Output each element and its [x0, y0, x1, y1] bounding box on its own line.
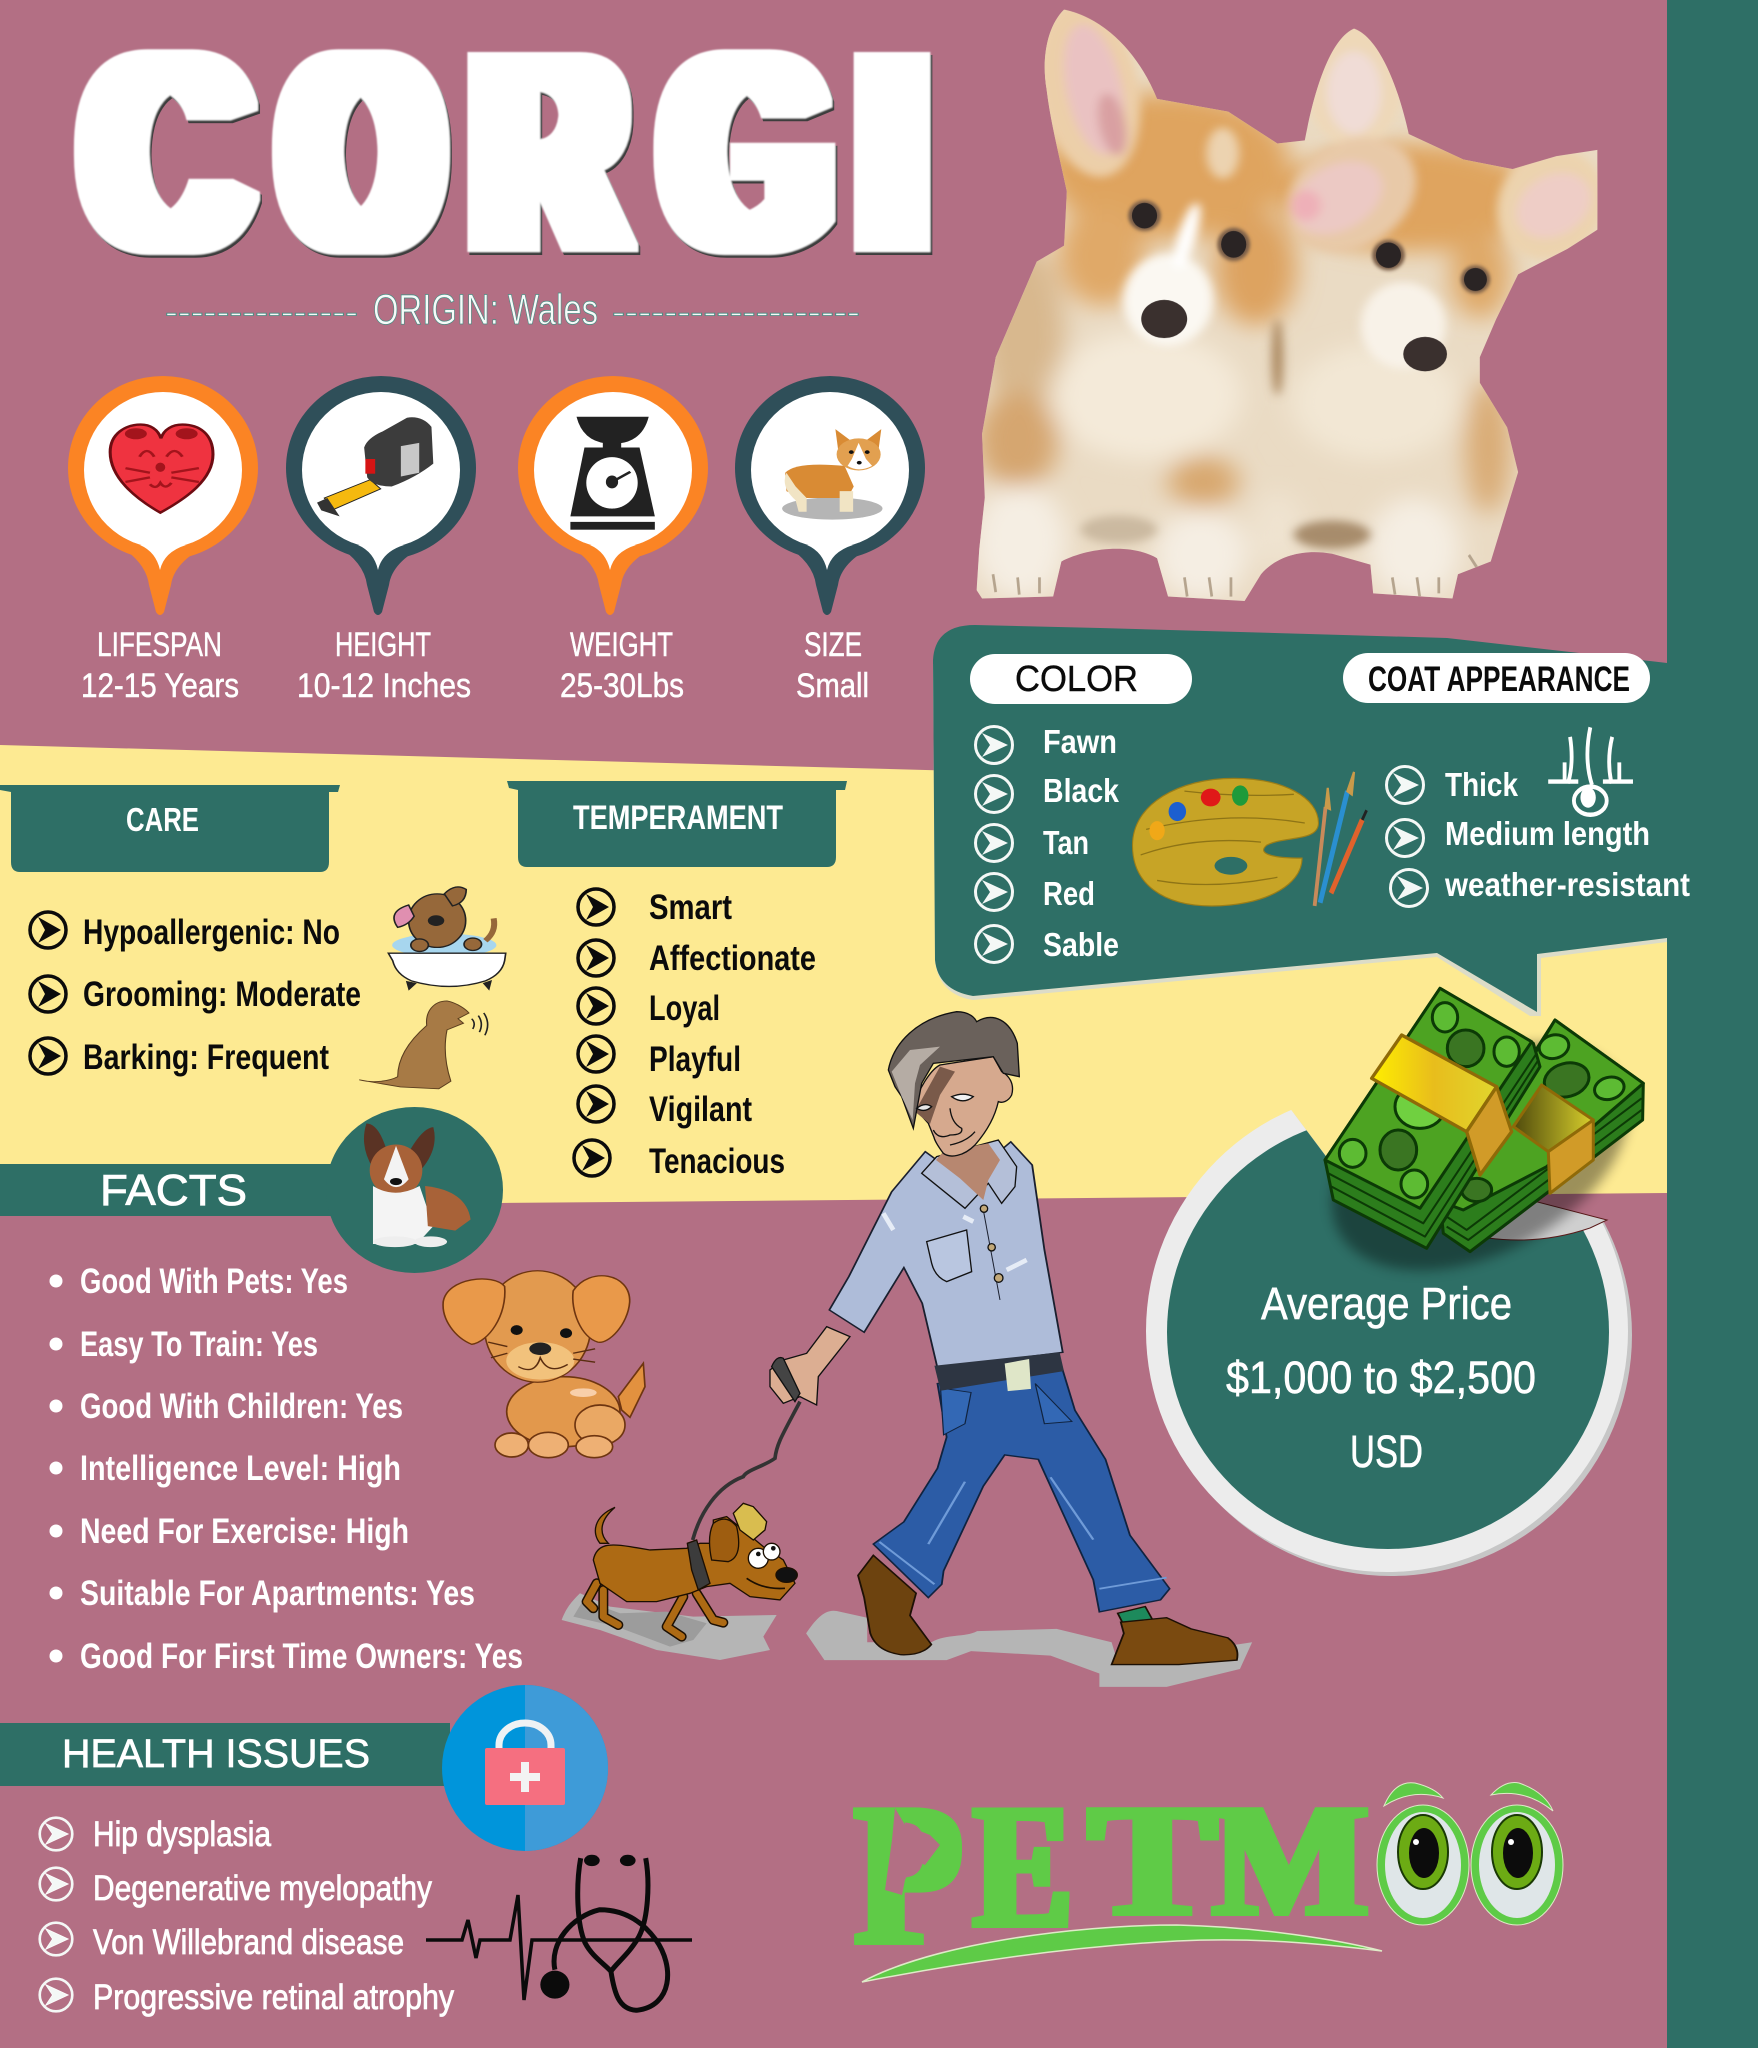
color list: Fawn — [1043, 723, 1117, 760]
icon: tape measure — [317, 417, 433, 516]
logo letters: P — [855, 1762, 962, 1988]
facts list: Good For First Time Owners: Yes — [80, 1637, 523, 1676]
icon: kitchen scale — [570, 417, 655, 530]
care header — [0, 785, 340, 872]
icon: small corgi — [782, 429, 883, 520]
icon: barking dog — [359, 1001, 488, 1089]
title: O — [286, 0, 436, 308]
logo letters: T — [1088, 1771, 1217, 1949]
icon: stacks of cash — [1293, 988, 1667, 1317]
boots and sock — [858, 1555, 1237, 1665]
photo: two corgi puppies — [976, 10, 1598, 601]
dog inner shadow — [573, 1600, 707, 1647]
coat list: Medium length — [1445, 815, 1650, 852]
temperament list: Loyal — [649, 989, 720, 1028]
swoosh — [862, 1925, 1382, 1982]
coat appearance pill — [1343, 653, 1650, 703]
panel body — [933, 625, 1667, 1012]
health list: Degenerative myelopathy — [93, 1869, 432, 1908]
yellow band — [0, 745, 1667, 1206]
icon: hair follicle — [1548, 727, 1633, 815]
illustration: toy puppy — [443, 1271, 645, 1458]
facts list: Intelligence Level: High — [80, 1449, 401, 1488]
stat labels — [81, 626, 869, 705]
eye left — [1377, 1783, 1469, 1925]
origin line — [165, 286, 860, 334]
panel: care — [0, 785, 506, 1089]
panel: facts — [0, 1107, 523, 1676]
icon: sitting corgi — [364, 1124, 471, 1247]
price text: Average Price — [1261, 1278, 1512, 1329]
facts list: Easy To Train: Yes — [80, 1325, 318, 1364]
right stack — [1440, 1020, 1643, 1252]
icon: heart — [110, 425, 213, 513]
facts list: Good With Pets: Yes — [80, 1262, 348, 1301]
dog body — [593, 1503, 797, 1602]
stat labels: HEIGHT — [335, 626, 431, 664]
title: I — [860, 0, 924, 308]
color list: Black — [1043, 772, 1120, 809]
health list: Hip dysplasia — [93, 1815, 271, 1854]
icon: stethoscope — [540, 1855, 668, 2010]
belt and buckle — [934, 1352, 1064, 1391]
color pill: COLOR — [1015, 658, 1138, 699]
origin line: ------------------- — [612, 296, 860, 329]
coat list: Thick — [1445, 766, 1519, 803]
pin: lifespan — [68, 376, 258, 615]
illustration: man walking — [770, 1012, 1252, 1687]
flap — [1488, 1200, 1607, 1240]
pin: weight — [518, 376, 708, 615]
temperament list: Smart — [649, 888, 732, 927]
care list: Grooming: Moderate — [83, 975, 361, 1014]
panel: health issues — [0, 1685, 692, 2017]
color list: Sable — [1043, 926, 1119, 963]
stat labels: 12-15 Years — [81, 667, 239, 705]
pin: height — [286, 376, 476, 615]
color list: Red — [1043, 875, 1095, 912]
facts heading: FACTS — [100, 1166, 247, 1215]
temperament list: Vigilant — [649, 1090, 752, 1129]
eye right — [1471, 1782, 1563, 1925]
stat labels: WEIGHT — [570, 626, 673, 664]
price text — [1226, 1278, 1536, 1477]
pin: size — [735, 376, 925, 615]
pocket and buttons — [883, 1205, 1027, 1300]
logo letters: E — [974, 1767, 1072, 1965]
logo letters — [855, 1762, 1368, 1988]
stat labels: LIFESPAN — [97, 626, 222, 664]
facts list: Need For Exercise: High — [80, 1512, 409, 1551]
title — [87, 0, 924, 308]
icon: paint palette and brushes — [1132, 772, 1367, 906]
stat labels: 25-30Lbs — [560, 667, 684, 705]
dog cut-out in P — [885, 1808, 940, 1895]
health list: Von Willebrand disease — [93, 1923, 404, 1962]
facts list: Suitable For Apartments: Yes — [80, 1574, 475, 1613]
facts badge — [326, 1107, 503, 1273]
stat labels: 10-12 Inches — [297, 667, 471, 705]
dog legs — [587, 1583, 723, 1637]
facts list — [50, 1262, 523, 1676]
origin line: --------------- — [165, 296, 358, 329]
health heading: HEALTH ISSUES — [62, 1732, 370, 1776]
temperament header: TEMPERAMENT — [573, 799, 783, 837]
care list — [30, 912, 361, 1077]
leash — [693, 1402, 800, 1540]
puppy body — [495, 1363, 645, 1458]
shirt — [829, 1142, 1063, 1368]
right side bar — [1667, 0, 1758, 2048]
arm and hand — [770, 1327, 850, 1405]
facts list: Good With Children: Yes — [80, 1387, 403, 1426]
coat list — [1386, 766, 1690, 906]
panel: temperament — [507, 781, 847, 1181]
title: G — [667, 0, 826, 308]
left stack — [1325, 988, 1540, 1248]
facts banner — [0, 1164, 340, 1216]
temperament list: Tenacious — [649, 1142, 785, 1181]
temperament list: Affectionate — [649, 939, 816, 978]
title: C — [87, 0, 244, 308]
coat list: weather-resistant — [1444, 866, 1690, 903]
band on left stack — [1372, 1035, 1512, 1175]
color pill — [970, 654, 1192, 704]
panel: average price — [1146, 1090, 1632, 1576]
temperament list: Playful — [649, 1040, 741, 1079]
panel: color and coat appearance — [933, 625, 1690, 1016]
icon: dog in bath — [388, 887, 506, 991]
dog ground shadow — [562, 1593, 777, 1660]
ground shadow — [806, 1611, 1252, 1687]
icon: ECG trace — [426, 1895, 692, 2000]
care list: Barking: Frequent — [83, 1038, 329, 1077]
price ring and disc — [1146, 1090, 1632, 1576]
health list — [40, 1815, 454, 2017]
stat labels: SIZE — [804, 626, 862, 664]
icon: medical bag — [442, 1685, 608, 1851]
color list: Tan — [1043, 824, 1089, 861]
health list: Progressive retinal atrophy — [93, 1978, 454, 2017]
care list: Hypoallergenic: No — [83, 913, 340, 952]
temperament list — [574, 888, 816, 1181]
health banner — [0, 1723, 450, 1786]
color list — [976, 723, 1120, 963]
title: R — [476, 0, 620, 308]
logo letters: M — [1213, 1771, 1368, 1949]
logo: PETMOO — [855, 1762, 1563, 1988]
care header: CARE — [126, 801, 199, 838]
illustration: small dog on leash — [562, 1402, 800, 1660]
coat appearance pill: COAT APPEARANCE — [1368, 660, 1630, 699]
panel edge — [933, 664, 1667, 1016]
stat labels: Small — [796, 667, 869, 705]
head — [888, 1012, 1019, 1208]
puppy head — [443, 1271, 630, 1382]
price text: $1,000 to $2,500 — [1226, 1352, 1536, 1403]
origin line: ORIGIN: Wales — [373, 286, 598, 334]
jeans — [873, 1370, 1170, 1612]
price text: USD — [1350, 1426, 1423, 1477]
temperament header — [507, 781, 847, 867]
cash shadow — [1293, 996, 1667, 1317]
band on right stack — [1513, 1085, 1593, 1193]
